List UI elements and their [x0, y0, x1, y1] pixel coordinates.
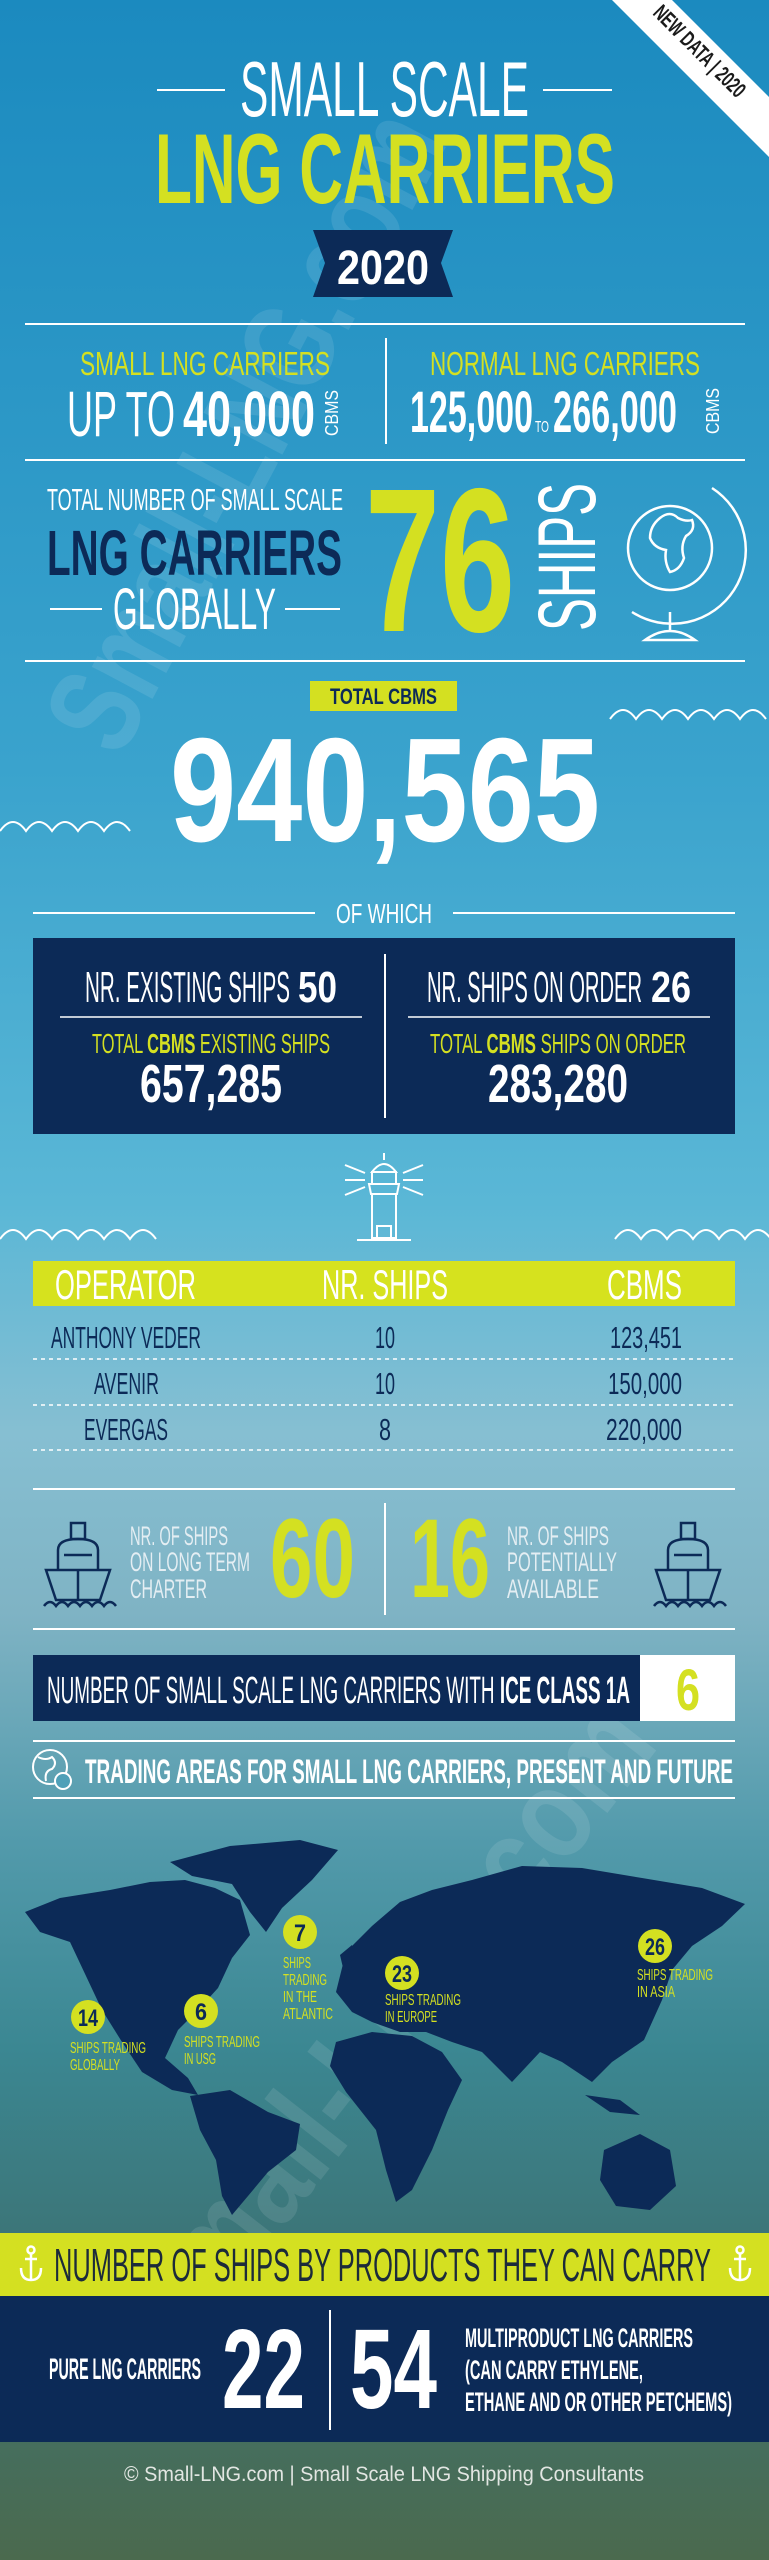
table: operators: 10 [375, 1320, 395, 1355]
map marker: 14 globally: 14 [78, 2005, 98, 2032]
table: operators: 8 [379, 1412, 391, 1447]
table: operators: OPERATOR [55, 1261, 196, 1308]
title: small scale: SMALL SCALE [240, 45, 529, 133]
potentially available stat: NR. OF SHIPS [507, 1521, 609, 1551]
ice class bar: 6 [676, 1658, 700, 1723]
potentially available stat: 16 [410, 1496, 490, 1621]
waves [0, 710, 769, 1239]
normal LNG carriers size: TO [535, 419, 549, 436]
map marker: 23 Europe: SHIPS TRADING [385, 1992, 461, 2009]
ice class bar [33, 1655, 735, 1723]
table: operators: 10 [375, 1366, 395, 1401]
products panel [0, 2296, 769, 2442]
normal LNG carriers size: 125,000 [410, 380, 533, 445]
map marker: 26 Asia: 26 [645, 1934, 665, 1961]
map marker: 6 USG [184, 1994, 260, 2068]
world map [25, 1840, 745, 2215]
map marker: 6 USG: SHIPS TRADING [184, 2034, 260, 2051]
icon: lighthouse [345, 1153, 423, 1240]
total ships label: GLOBALLY [113, 577, 276, 642]
map marker: 14 globally: GLOBALLY [70, 2057, 120, 2074]
long term charter stat: NR. OF SHIPS [130, 1521, 228, 1551]
icon: anchors [21, 2246, 750, 2280]
existing ships: 50 [298, 963, 337, 1012]
existing ships: 657,285 [140, 1054, 282, 1114]
map marker: 26 Asia [637, 1929, 713, 2001]
of which divider: OF WHICH [336, 898, 432, 929]
long term charter stat [130, 1496, 355, 1621]
ships on order: 283,280 [488, 1054, 628, 1114]
map marker: 6 USG: 6 [195, 1999, 207, 2026]
table: operators: EVERGAS [84, 1412, 168, 1447]
map marker: 23 Europe [385, 1956, 461, 2026]
products panel: PURE LNG CARRIERS [49, 2353, 201, 2386]
map marker: 7 atlantic: ATLANTIC [283, 2006, 333, 2023]
year badge 2020: 2020 [337, 242, 429, 295]
existing ships: NR. EXISTING SHIPS [85, 963, 290, 1012]
table: operators: 150,000 [608, 1366, 682, 1401]
total ships label: TOTAL NUMBER OF SMALL SCALE [47, 482, 343, 517]
long term charter stat: 60 [270, 1496, 355, 1621]
normal LNG carriers size: CBMS [703, 388, 723, 434]
map marker: 26 Asia: IN ASIA [637, 1984, 675, 2001]
map marker: 7 atlantic: TRADING [283, 1972, 327, 1989]
table: operators: CBMS [607, 1261, 682, 1308]
table: operators: AVENIR [94, 1366, 159, 1401]
potentially available stat [410, 1496, 617, 1621]
table: operators: 123,451 [610, 1320, 682, 1355]
small LNG carriers size: SMALL LNG CARRIERS [80, 345, 330, 382]
long term charter stat: CHARTER [130, 1574, 207, 1604]
total cbms badge: TOTAL CBMS [330, 684, 437, 709]
small LNG carriers size [67, 345, 342, 450]
existing ships [60, 963, 362, 1114]
potentially available stat: AVAILABLE [507, 1574, 599, 1604]
icon: ship right [654, 1523, 726, 1606]
table: operators [33, 1261, 735, 1450]
small LNG carriers size: 40,000 [183, 378, 315, 450]
total ships label: LNG CARRIERS [47, 517, 342, 589]
products panel: 22 [222, 2306, 305, 2432]
map marker: 7 atlantic: IN THE [283, 1989, 317, 2006]
map marker: 6 USG: IN USG [184, 2051, 216, 2068]
products panel: 54 [350, 2306, 437, 2432]
small LNG carriers size: UP TO [67, 378, 175, 450]
map marker: 23 Europe: 23 [392, 1961, 412, 1988]
existing ships: TOTAL CBMS EXISTING SHIPS [92, 1028, 330, 1059]
table: operators: ANTHONY VEDER [51, 1320, 201, 1355]
total cbms badge [310, 681, 457, 711]
small LNG carriers size: CBMS [322, 390, 342, 436]
total ships label [47, 482, 343, 642]
panel: existing vs on order [33, 938, 735, 1134]
potentially available stat: POTENTIALLY [507, 1547, 617, 1577]
big number 76 ships: SHIPS [522, 483, 613, 631]
map marker: 7 atlantic: 7 [294, 1920, 306, 1947]
normal LNG carriers size [410, 345, 723, 445]
ships on order: 26 [651, 963, 691, 1012]
year badge 2020 [313, 230, 453, 297]
map marker: 14 globally [70, 2000, 146, 2074]
map marker: 7 atlantic: SHIPS [283, 1955, 311, 1972]
footer: © Small-LNG.com | Small Scale LNG Shipping Consultants [124, 2463, 644, 2486]
table: operators: 220,000 [606, 1412, 682, 1447]
map marker: 23 Europe: IN EUROPE [385, 2009, 437, 2026]
icon: ship left [44, 1523, 116, 1606]
ships on order [408, 963, 710, 1114]
big number 940,565: 940,565 [170, 708, 600, 873]
icon: globe [628, 488, 746, 640]
long term charter stat: ON LONG TERM [130, 1547, 250, 1577]
table: operators: NR. SHIPS [322, 1261, 448, 1308]
map marker: 14 globally: SHIPS TRADING [70, 2040, 146, 2057]
map marker: 7 atlantic [283, 1915, 333, 2023]
normal LNG carriers size: 266,000 [553, 380, 677, 445]
map marker: 26 Asia: SHIPS TRADING [637, 1967, 713, 1984]
big number 76 ships: 76 [365, 446, 515, 675]
